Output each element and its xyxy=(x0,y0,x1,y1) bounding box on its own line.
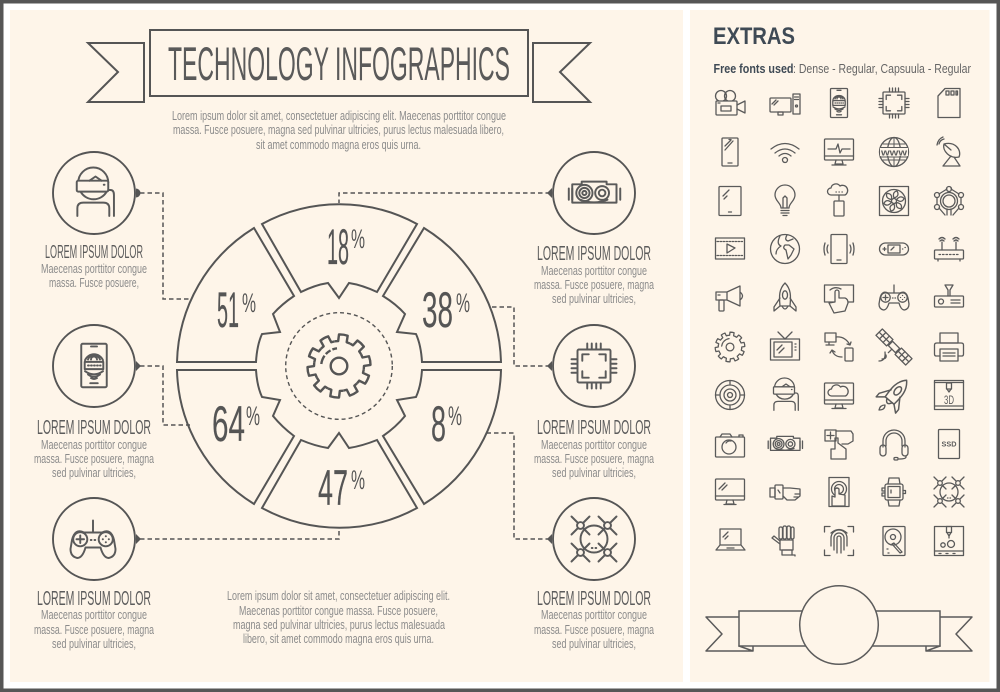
description xyxy=(41,262,147,290)
icon: SSD drive: SSD xyxy=(942,442,956,448)
heading: LOREM IPSUM DOLOR xyxy=(537,587,651,610)
icon: phone fingerprint xyxy=(830,88,848,118)
footer text block xyxy=(227,589,450,646)
heading: LOREM IPSUM DOLOR xyxy=(37,416,151,439)
segment: 51%: % xyxy=(242,288,256,318)
icon circle: gamepad xyxy=(53,498,141,580)
icon: target xyxy=(716,380,744,410)
icon circle: phone fingerprint xyxy=(53,325,141,407)
description: massa. Fusce posuere, magna xyxy=(34,623,154,637)
description: massa. Fusce posuere, xyxy=(49,276,139,290)
segment: 51%: 51 xyxy=(217,282,239,338)
icon: laptop xyxy=(716,529,745,550)
icon: central gear xyxy=(307,334,371,398)
icon: gamepad xyxy=(879,285,909,310)
description xyxy=(534,264,654,306)
icon: vibrating phone xyxy=(824,234,854,264)
icon circle: VR headset person xyxy=(53,152,140,234)
footer text block: libero, sit amet commodo magna eros quis urna. xyxy=(243,632,434,646)
icon: hard disk drive xyxy=(883,526,905,556)
icon: wifi router xyxy=(934,238,964,261)
ribbon tail: left xyxy=(706,617,753,651)
icon: satellite xyxy=(873,329,912,368)
icon: cloud and phone xyxy=(828,184,848,216)
description: sed pulvinar ultricies, xyxy=(52,637,136,651)
badge circle xyxy=(800,586,878,664)
item: top left xyxy=(41,152,147,290)
segment: 18%: 18 xyxy=(327,219,349,275)
segment: 18%: % xyxy=(351,224,365,254)
ribbon tail: left xyxy=(88,43,144,102)
description: Maecenas porttitor congue xyxy=(41,438,147,452)
icon: video camera xyxy=(716,90,745,115)
description: massa. Fusce posuere, magna xyxy=(534,623,654,637)
segment: 64%: 64 xyxy=(212,396,245,452)
icon: megaphone xyxy=(716,286,742,311)
heading: LOREM IPSUM DOLOR xyxy=(537,416,651,439)
icon: photo camera xyxy=(716,434,744,457)
segment: 51% xyxy=(177,228,294,362)
icon: drone xyxy=(934,477,964,507)
description: Maecenas porttitor congue xyxy=(541,608,647,622)
description: sed pulvinar ultricies, xyxy=(552,466,636,480)
icon: SSD drive xyxy=(938,430,960,458)
icon circle: drone xyxy=(547,498,635,580)
intro text block xyxy=(172,109,506,152)
description: Maecenas porttitor congue xyxy=(41,262,147,276)
icon grid xyxy=(715,88,964,556)
item: top right xyxy=(534,152,654,306)
icon: monitor with pulse xyxy=(824,139,854,165)
segment: 47% xyxy=(262,433,417,528)
icon: wristwatch on arm xyxy=(770,485,800,500)
description: massa. Fusce posuere, magna xyxy=(34,452,154,466)
icon: launching rocket xyxy=(876,372,916,413)
panel: extras xyxy=(690,10,990,682)
icon: desktop monitor xyxy=(716,479,744,504)
ribbon tail: right xyxy=(926,617,972,651)
title banner: TECHNOLOGY INFOGRAPHICS xyxy=(168,37,510,90)
icon: www globe: www xyxy=(880,148,908,158)
fonts note xyxy=(714,61,972,76)
segment: 38% xyxy=(383,228,501,362)
description: massa. Fusce posuere, magna xyxy=(534,452,654,466)
icon: light bulb xyxy=(775,185,795,216)
description: sed pulvinar ultricies, xyxy=(52,466,136,480)
icon: printer xyxy=(934,333,964,361)
ribbon badge xyxy=(706,586,972,664)
icon: device sync xyxy=(825,333,853,361)
footer text block: Maecenas porttitor congue massa. Fusce posuere, xyxy=(239,604,438,618)
segment: 47%: 47 xyxy=(318,460,348,516)
icon circle: microchip xyxy=(547,325,635,407)
item: bottom right xyxy=(534,498,654,651)
description xyxy=(34,608,154,651)
segment: 38%: 38 xyxy=(422,282,453,338)
icon: www globe xyxy=(880,138,908,166)
description xyxy=(534,608,654,651)
icon: smartwatch touch xyxy=(825,430,853,459)
description: massa. Fusce posuere, magna xyxy=(534,278,654,292)
icon: wifi xyxy=(771,144,799,162)
segment: 8% xyxy=(383,370,501,504)
icon: settings gear xyxy=(715,332,745,362)
extras heading: EXTRAS xyxy=(713,23,795,50)
intro text block: sit amet commodo magna eros quis urna. xyxy=(256,138,421,152)
icon: tablet xyxy=(719,186,741,216)
segment: 64% xyxy=(177,370,294,504)
panel: main infographic xyxy=(10,10,683,682)
icon: SD card xyxy=(938,88,960,118)
footer text block: Lorem ipsum dolor sit amet, consectetuer adipiscing elit. xyxy=(227,589,450,603)
intro text block: massa. Fusce posuere, magna sed pulvinar ultricies, purus lectus malesuada libero, xyxy=(173,123,504,137)
segment: 18% xyxy=(262,204,417,298)
segment: 64%: % xyxy=(246,401,260,431)
icon: television xyxy=(770,332,800,360)
icon: 3D printer xyxy=(934,380,964,410)
segment: 8%: % xyxy=(448,401,462,431)
icon: microchip xyxy=(879,88,909,118)
icon: projector xyxy=(934,285,964,307)
icon: smartphone xyxy=(722,138,738,166)
icon circle: VR goggles xyxy=(547,152,635,234)
icon: cloud monitor xyxy=(824,383,854,408)
description xyxy=(34,438,154,480)
title banner xyxy=(88,30,590,102)
icon: robotic hand xyxy=(772,526,795,556)
icon: desktop computer xyxy=(770,94,800,115)
segment: 47%: % xyxy=(351,465,365,495)
dashed hub ring xyxy=(286,313,392,419)
icon: smartwatch xyxy=(882,478,906,506)
description: sed pulvinar ultricies, xyxy=(552,637,636,651)
icon: cooling fan xyxy=(880,186,908,216)
description xyxy=(534,438,654,480)
item: middle right xyxy=(534,325,654,480)
description: Maecenas porttitor congue xyxy=(541,264,647,278)
icon: 3D printer with gears xyxy=(934,526,964,556)
item: bottom left xyxy=(34,498,154,651)
icon: 3D printer: 3D xyxy=(944,393,954,407)
icon: network nodes xyxy=(934,186,964,215)
icon: headset xyxy=(880,430,908,460)
fonts note: Free fonts used xyxy=(714,61,794,76)
segmented wheel chart xyxy=(177,204,501,528)
intro text block: Lorem ipsum dolor sit amet, consectetuer adipiscing elit. Maecenas porttitor congue xyxy=(172,109,506,123)
description: Maecenas porttitor congue xyxy=(41,608,147,622)
icon: video player xyxy=(716,238,744,259)
item: middle left xyxy=(34,325,154,480)
segment: 38%: % xyxy=(456,288,470,318)
description: sed pulvinar ultricies, xyxy=(552,292,636,306)
icon: touch screen swipe xyxy=(824,285,854,313)
heading: LOREM IPSUM DOLOR xyxy=(45,242,143,262)
ribbon band xyxy=(739,611,940,646)
icon: fingerprint scan xyxy=(824,526,854,556)
icon: VR person xyxy=(774,378,798,410)
ribbon tail: right xyxy=(533,43,590,102)
icon: handheld console xyxy=(880,243,908,255)
footer text block: magna sed pulvinar ultricies, purus lectus malesuada xyxy=(233,618,445,632)
icon: rocket xyxy=(774,283,796,311)
icon: touch tablet xyxy=(829,478,849,506)
dashed connector lines xyxy=(140,193,550,539)
icon: VR goggles xyxy=(768,436,802,450)
heading: LOREM IPSUM DOLOR xyxy=(37,587,151,610)
icon: satellite dish xyxy=(937,137,960,166)
icon: earth xyxy=(770,234,800,264)
heading: LOREM IPSUM DOLOR xyxy=(537,242,651,265)
segment: 8%: 8 xyxy=(431,396,446,452)
description: Maecenas porttitor congue xyxy=(541,438,647,452)
title box xyxy=(150,30,528,96)
